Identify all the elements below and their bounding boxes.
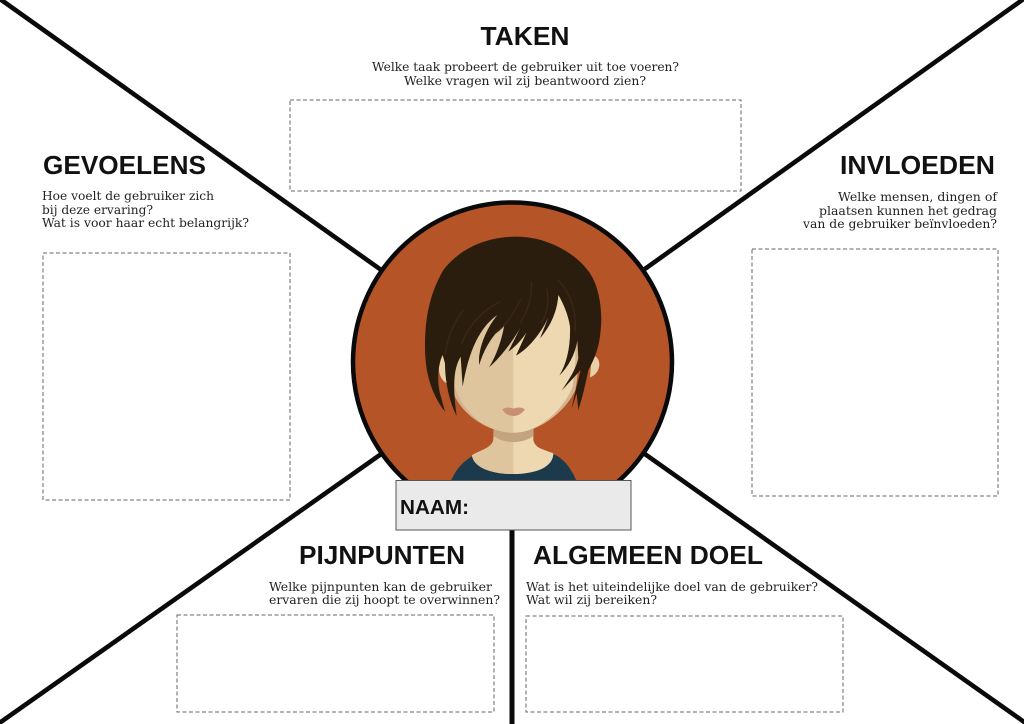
- text: pijnpunten questions: ervaren die zij hoopt te overwinnen?: [269, 593, 500, 607]
- hair: [425, 237, 601, 416]
- text: invloeden questions: Welke mensen, dingen of: [838, 190, 999, 204]
- face: [452, 290, 575, 433]
- face shaded left: [452, 290, 513, 433]
- hair strands: [445, 280, 575, 355]
- persona circle: [353, 202, 672, 522]
- heading: gevoelens: GEVOELENS: [43, 150, 206, 180]
- text: gevoelens questions: Hoe voelt de gebruiker zich: [42, 189, 214, 203]
- ears: [439, 350, 599, 384]
- heading: taken: TAKEN: [480, 21, 570, 51]
- panel: pijnpunten: [177, 540, 500, 712]
- body and face: [439, 290, 599, 482]
- lips: [502, 407, 525, 416]
- icon: persona avatar: [425, 237, 601, 482]
- shirt: [451, 454, 577, 482]
- neck and shoulders: [472, 427, 553, 474]
- text: invloeden questions: plaatsen kunnen het gedrag: [819, 204, 997, 218]
- name label: NAAM:: [400, 497, 469, 519]
- text: algemeen doel questions: Wat wil zij bereiken?: [526, 593, 657, 607]
- text: taken questions: [372, 60, 679, 88]
- text: gevoelens questions: Wat is voor haar echt belangrijk?: [42, 216, 249, 230]
- name box background: [396, 480, 631, 530]
- face rim: [450, 290, 578, 433]
- input box: gevoelens: [43, 253, 290, 500]
- panel: gevoelens: [42, 150, 290, 500]
- text: taken questions: Welke vragen wil zij beantwoord zien?: [404, 74, 646, 88]
- heading: pijnpunten: PIJNPUNTEN: [299, 540, 465, 570]
- shaded neck left: [472, 427, 513, 474]
- input box: pijnpunten: [177, 615, 494, 712]
- heading: invloeden: INVLOEDEN: [840, 150, 995, 180]
- name box: [396, 480, 631, 530]
- panel: algemeen doel: [526, 540, 843, 712]
- text: pijnpunten questions: [269, 580, 500, 607]
- panel: invloeden: [752, 150, 999, 496]
- text: invloeden questions: van de gebruiker beïnvloeden?: [802, 217, 997, 231]
- input box: taken: [290, 100, 741, 191]
- heading: algemeen doel: ALGEMEEN DOEL: [533, 540, 763, 570]
- text: taken questions: Welke taak probeert de gebruiker uit toe voeren?: [372, 60, 679, 74]
- text: algemeen doel questions: Wat is het uiteindelijke doel van de gebruiker?: [526, 580, 818, 594]
- input box: invloeden: [752, 249, 998, 496]
- text: pijnpunten questions: Welke pijnpunten kan de gebruiker: [269, 580, 492, 594]
- input box: algemeen doel: [526, 616, 843, 712]
- panel: taken: [290, 21, 741, 191]
- text: invloeden questions: [802, 190, 999, 231]
- text: gevoelens questions: bij deze ervaring?: [42, 203, 153, 217]
- text: gevoelens questions: [42, 189, 249, 230]
- text: algemeen doel questions: [526, 580, 818, 607]
- neck shadow: [494, 428, 533, 442]
- hair silhouette: [425, 237, 601, 416]
